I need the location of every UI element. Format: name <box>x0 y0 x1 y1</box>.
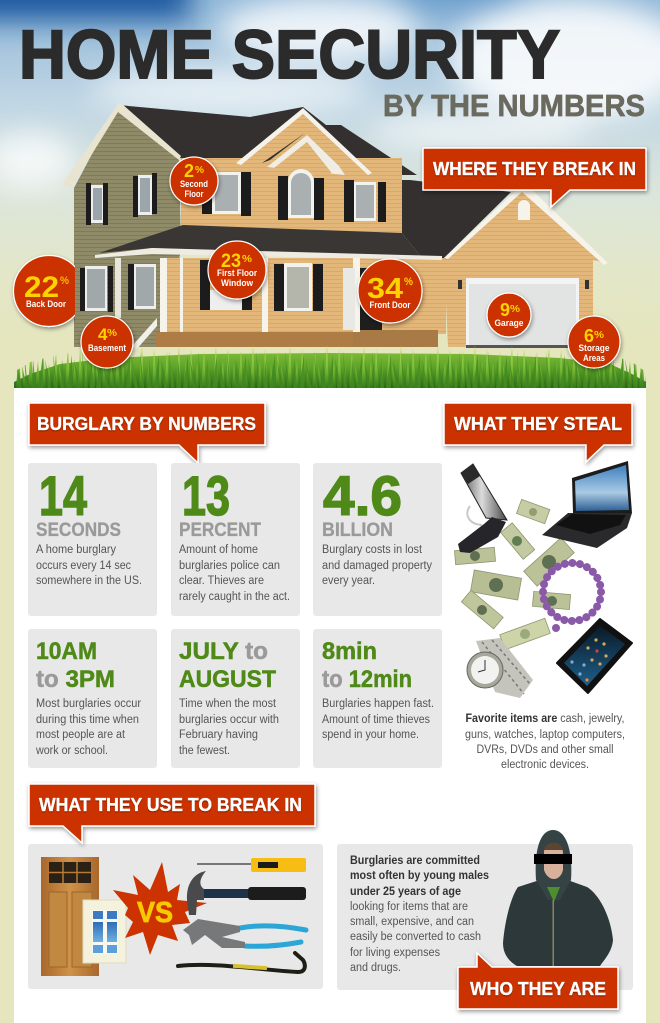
banner: where they break in: WHERE THEY BREAK IN <box>433 158 636 179</box>
title: HOME SECURITY <box>19 16 560 93</box>
banner: where they break in <box>423 148 646 207</box>
stat card: 8min to 12min <box>313 629 442 768</box>
lower windows and door <box>80 260 382 330</box>
icon: wristwatch <box>467 638 533 698</box>
bubble: front door 34%: Front Door <box>370 300 411 310</box>
stat card: 8min to 12min: to 12min <box>322 666 412 693</box>
bubble: basement 4% <box>81 316 133 368</box>
bubble: garage 9% <box>487 293 531 337</box>
icon: vs starburst: VS <box>137 897 173 929</box>
stat card: 8min to 12min: Amount of time thieves <box>322 714 430 726</box>
bubble: second floor 2%: Second <box>180 179 208 189</box>
text: who they are bold: Burglaries are committed <box>350 855 480 867</box>
bubble: back door 22%: % <box>60 275 69 287</box>
stat card: 10am to 3pm: work or school. <box>35 745 108 757</box>
bubble: basement 4%: Basement <box>88 343 126 353</box>
bubble: second floor 2%: % <box>195 165 204 176</box>
bubble: storage areas 6%: % <box>594 330 604 341</box>
black censor bar <box>534 854 572 864</box>
stat card: 4.6 billion: BILLION <box>322 519 393 541</box>
banner: what they steal <box>444 403 632 462</box>
grass <box>14 345 646 388</box>
bubble: storage areas 6%: Storage <box>578 343 610 353</box>
text: favorite items line 3: DVRs, DVDs and other small <box>476 744 614 756</box>
stat card: 8min to 12min: spend in your home. <box>322 729 419 741</box>
stat card: 13 percent: burglaries police can <box>179 560 280 572</box>
stat card: july to august: burglaries occur with <box>179 714 279 726</box>
banner: who they are: WHO THEY ARE <box>470 978 606 999</box>
stat card: 4.6 billion <box>313 463 442 616</box>
icon: money bills <box>454 499 574 650</box>
text: who they are bold: most often by young males <box>350 870 489 882</box>
stat card: 10am to 3pm: 10AM <box>36 638 97 665</box>
bubble: storage areas 6%: 6 <box>584 326 594 346</box>
bubble: first floor window 23%: % <box>242 254 252 265</box>
icon: screwdriver <box>197 858 306 872</box>
icon: window <box>83 900 126 963</box>
bubble: front door 34%: % <box>404 276 413 288</box>
stat card: 13 percent: clear. Thieves are <box>179 575 264 587</box>
stat card: 8min to 12min: 8min <box>322 638 377 665</box>
stat card: 13 percent: Amount of home <box>179 544 258 556</box>
text: who they are body: small, expensive, and can <box>350 916 474 928</box>
text: who they are bold <box>350 855 489 898</box>
text: who they are body: looking for items that are <box>350 901 468 913</box>
bubble: storage areas 6% <box>568 316 620 368</box>
stat card: 13 percent <box>171 463 300 616</box>
text: who they are body: for living expenses <box>350 947 440 959</box>
bubble: back door 22%: 22 <box>24 271 59 304</box>
panel: tools <box>28 844 323 989</box>
bubble: back door 22% <box>14 256 84 326</box>
bubble: garage 9%: Garage <box>494 318 524 328</box>
stat card: 10am to 3pm: Most burglaries occur <box>36 698 141 710</box>
panel: who they are <box>337 844 633 990</box>
figure: hooded burglar <box>503 830 613 966</box>
banner: burglary by numbers: BURGLARY BY NUMBERS <box>37 413 256 434</box>
stat card: july to august: JULY to <box>179 638 268 665</box>
stat card: 14 seconds: 14 <box>39 464 87 527</box>
upper front windows <box>202 169 386 222</box>
garage door <box>458 278 593 348</box>
stat card: 8min to 12min: Burglaries happen fast. <box>322 698 434 710</box>
icon: bracelet <box>543 563 601 632</box>
stat card: july to august: AUGUST <box>179 666 276 693</box>
icon: wooden door <box>41 857 99 976</box>
bubble: basement 4%: 4 <box>98 325 108 344</box>
white content panel <box>14 388 646 1023</box>
text: favorite items line 2: guns, watches, laptop computers, <box>465 729 625 741</box>
sky background <box>0 0 660 345</box>
text: who they are body: and drugs. <box>350 962 401 974</box>
icon: tablet <box>557 619 632 693</box>
stat card: 4.6 billion: Burglary costs in lost <box>322 544 423 556</box>
stat card: 14 seconds: occurs every 14 sec <box>36 560 131 572</box>
upper olive windows <box>86 173 157 225</box>
stat card: 14 seconds: somewhere in the US. <box>36 575 142 587</box>
banner: what they use to break in <box>29 784 315 843</box>
stat card: july to august <box>171 629 300 768</box>
banner: burglary by numbers <box>29 403 265 463</box>
banner: who they are <box>458 953 618 1009</box>
stat card: 4.6 billion: every year. <box>322 575 375 587</box>
stat card: july to august: February having <box>179 729 258 741</box>
stat card: july to august: the fewest. <box>179 745 230 757</box>
stat card: 14 seconds: SECONDS <box>36 519 121 541</box>
text: favorite items line 4: electronic devices. <box>501 759 589 771</box>
icon: handgun <box>458 464 507 553</box>
bubble: basement 4%: % <box>107 328 117 339</box>
icon: laptop <box>542 461 632 548</box>
bubble: front door 34% <box>358 259 422 323</box>
banner: what they steal: WHAT THEY STEAL <box>454 413 622 434</box>
text: who they are body <box>350 901 481 974</box>
bubble: front door 34%: 34 <box>367 273 403 305</box>
bubble: back door 22%: Back Door <box>26 299 66 309</box>
stat card: 14 seconds <box>28 463 157 616</box>
banner: what they use to break in: WHAT THEY USE TO BREAK IN <box>39 794 302 815</box>
stat card: 10am to 3pm: during this time when <box>36 714 139 726</box>
subtitle: BY THE NUMBERS <box>383 88 645 123</box>
text: favorite items: Favorite items are cash, jewelry, <box>466 713 624 725</box>
bubble: first floor window 23%: Window <box>221 278 254 288</box>
stat card: 4.6 billion: 4.6 <box>323 464 402 527</box>
bubble: storage areas 6%: Areas <box>583 353 605 363</box>
icon: vs starburst <box>113 862 207 955</box>
icon: crowbar <box>178 953 305 972</box>
bubble: first floor window 23% <box>208 241 266 299</box>
bubble: second floor 2%: Floor <box>184 189 204 199</box>
house illustration <box>62 104 608 350</box>
bubble: first floor window 23%: 23 <box>221 251 241 272</box>
stat card: 13 percent: PERCENT <box>179 519 261 541</box>
stat card: 10am to 3pm: to 3PM <box>36 666 115 693</box>
stat card: 13 percent: 13 <box>182 464 230 527</box>
bubble: first floor window 23%: First Floor <box>217 268 257 278</box>
stat card: 10am to 3pm <box>28 629 157 768</box>
stat card: 10am to 3pm: most people are at <box>36 729 126 741</box>
bubble: garage 9%: 9 <box>500 300 510 320</box>
stat card: july to august: Time when the most <box>179 698 277 710</box>
bubble: second floor 2% <box>170 157 218 205</box>
icon: pliers <box>183 919 306 948</box>
text: who they are bold: under 25 years of age <box>350 886 461 898</box>
bubble: second floor 2%: 2 <box>184 161 194 181</box>
stat card: 13 percent: rarely caught in the act. <box>179 591 290 603</box>
icon: hammer <box>187 871 306 915</box>
text: who they are body: easily be converted to cash <box>350 931 481 943</box>
bubble: garage 9%: % <box>510 304 520 315</box>
stat card: 14 seconds: A home burglary <box>36 544 116 556</box>
stat card: 4.6 billion: and damaged property <box>322 560 432 572</box>
